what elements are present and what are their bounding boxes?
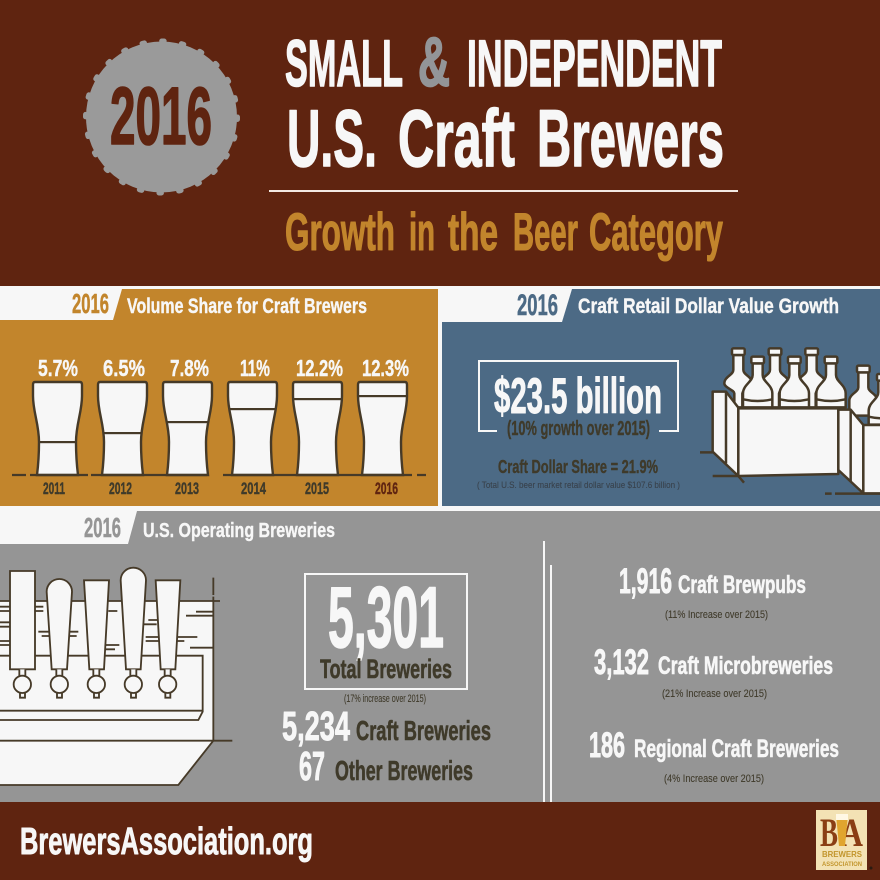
heading: volume share: Volume Share for Craft Brewers [127, 295, 367, 318]
stat: microbreweries: 3,132 [594, 643, 649, 682]
stat: regional breweries: 186 [589, 726, 625, 765]
heading: operating breweries: U.S. Operating Breweries [143, 520, 335, 542]
year labels: 2014 [241, 479, 266, 498]
stat: other breweries [299, 743, 473, 789]
percentages [38, 355, 409, 381]
logo: brewers association: ASSOCIATION [822, 861, 862, 868]
panel: operating breweries [0, 511, 880, 802]
logo: brewers association: B [820, 810, 838, 855]
callout: 23.5 billion: $23.5 billion [494, 368, 662, 424]
icon: bottle cap badge [86, 41, 238, 193]
heading: operating breweries: 2016 [84, 512, 121, 543]
subtitle: Beer [513, 203, 578, 262]
subtitle: Category [589, 203, 723, 262]
year labels: 2013 [175, 479, 199, 498]
percentages: 6.5% [103, 355, 145, 381]
stat: regional breweries [589, 726, 839, 785]
website url: BrewersAssociation.org [20, 821, 313, 863]
stat: other breweries: Other Breweries [335, 755, 473, 786]
callout: total breweries: 5,301 [328, 570, 444, 666]
footer band [0, 802, 880, 880]
stat: brewpubs [619, 562, 806, 621]
beer glasses chart [12, 382, 426, 475]
text: craft dollar share: ( Total U.S. beer market retail dollar value $107.6 billion ) [477, 480, 680, 491]
subtitle: the [448, 203, 498, 262]
logo: brewers association: BREWERS [822, 850, 863, 859]
stat: craft breweries [282, 703, 491, 749]
subtitle: in [409, 203, 435, 262]
title line one [285, 23, 722, 101]
text: craft dollar share: Craft Dollar Share = 21.9% [498, 456, 658, 477]
title line one: & [418, 23, 450, 101]
icon: six-pack of bottles [700, 348, 880, 494]
heading: operating breweries [84, 512, 335, 543]
text: increase over 2015: (17% increase over 2015) [344, 693, 426, 705]
year labels: 2016 [375, 479, 398, 498]
percentages: 7.8% [170, 355, 209, 381]
callout: 23.5 billion [479, 361, 678, 440]
percentages: 12.3% [362, 355, 409, 381]
year labels: 2011 [43, 479, 65, 498]
stat: microbreweries: (21% Increase over 2015) [662, 688, 767, 700]
callout: total breweries: Total Breweries [320, 654, 452, 684]
subtitle [285, 203, 723, 262]
year labels [43, 479, 398, 498]
percentages: 12.2% [296, 355, 343, 381]
logo: brewers association: A [840, 810, 863, 855]
stat: regional breweries: (4% Increase over 2015) [664, 773, 764, 785]
stat: brewpubs: 1,916 [619, 562, 672, 601]
stat: microbreweries [594, 643, 833, 700]
title line two: Brewers [537, 94, 724, 184]
stat: craft breweries: Craft Breweries [356, 715, 491, 746]
icon: draft beer taps [0, 568, 232, 785]
year labels: 2012 [109, 479, 132, 498]
title line two: U.S. [287, 94, 377, 184]
title line one: SMALL [285, 26, 403, 100]
callout: total breweries [305, 570, 467, 689]
logo: brewers association [816, 810, 872, 870]
panel: volume share [0, 288, 438, 506]
stat: brewpubs: Craft Brewpubs [678, 571, 806, 599]
icon: bottle cap badge: 2016 [110, 71, 212, 162]
panel: retail dollar value [441, 289, 880, 506]
heading: retail dollar value [517, 289, 839, 322]
heading: volume share: 2016 [72, 288, 109, 319]
text: craft dollar share [477, 456, 680, 491]
subtitle: Growth [285, 203, 395, 262]
title line two [287, 94, 724, 184]
percentages: 5.7% [38, 355, 78, 381]
heading: volume share [72, 288, 367, 319]
callout: 23.5 billion: (10% growth over 2015) [507, 418, 650, 440]
stat: other breweries: 67 [299, 743, 325, 789]
header band [0, 0, 880, 286]
title line two: Craft [398, 94, 515, 184]
stat: craft breweries: 5,234 [282, 703, 350, 749]
year labels: 2015 [305, 479, 329, 498]
stat: brewpubs: (11% Increase over 2015) [665, 609, 768, 621]
heading: retail dollar value: 2016 [517, 289, 558, 322]
percentages: 11% [240, 355, 270, 381]
